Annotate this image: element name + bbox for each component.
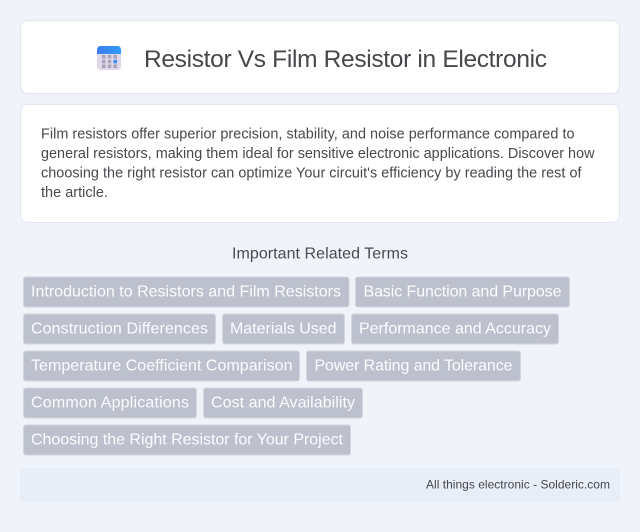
footer credit: All things electronic - Solderic.com <box>426 478 610 492</box>
text line 2: general resistors, making them ideal for sensitive electronic applications. Discover how <box>41 146 595 162</box>
tag: construction <box>24 314 216 344</box>
tag: basic function: Basic Function and Purpose <box>364 284 562 300</box>
tag: materials: Materials Used <box>230 320 336 338</box>
panel: intro text <box>20 104 620 222</box>
tag: materials <box>222 314 344 344</box>
tag: choosing: Choosing the Right Resistor for Your Project <box>31 432 344 448</box>
tag: cost <box>204 388 362 418</box>
tag: choosing <box>24 425 350 455</box>
tag: performance: Performance and Accuracy <box>359 320 551 338</box>
tag: temperature <box>24 351 300 381</box>
tag: basic function <box>356 277 570 307</box>
tag: construction: Construction Differences <box>31 320 208 338</box>
tag: cost: Cost and Availability <box>211 394 355 412</box>
icon: calendar <box>97 46 121 70</box>
panel: header <box>20 20 620 94</box>
text line 3: choosing the right resistor can optimize Your circuit's efficiency by reading the rest of <box>41 166 582 182</box>
tag: power rating <box>306 351 520 381</box>
tag: introduction: Introduction to Resistors and Film Resistors <box>31 284 341 300</box>
tag: introduction <box>24 277 349 307</box>
text line 4: the article. <box>41 185 108 201</box>
tag: performance <box>352 314 558 344</box>
tag: common applications <box>24 388 196 418</box>
footer <box>20 468 620 502</box>
title: Resistor Vs Film Resistor in Electronic <box>144 46 547 73</box>
tag: power rating: Power Rating and Tolerance <box>314 358 513 374</box>
text line 1: Film resistors offer superior precision, stability, and noise performance compared to <box>41 126 574 142</box>
tag list <box>24 277 570 455</box>
heading: related terms: Important Related Terms <box>232 246 408 262</box>
tag: temperature: Temperature Coefficient Comparison <box>31 358 292 374</box>
tag: common applications: Common Applications <box>31 394 189 412</box>
